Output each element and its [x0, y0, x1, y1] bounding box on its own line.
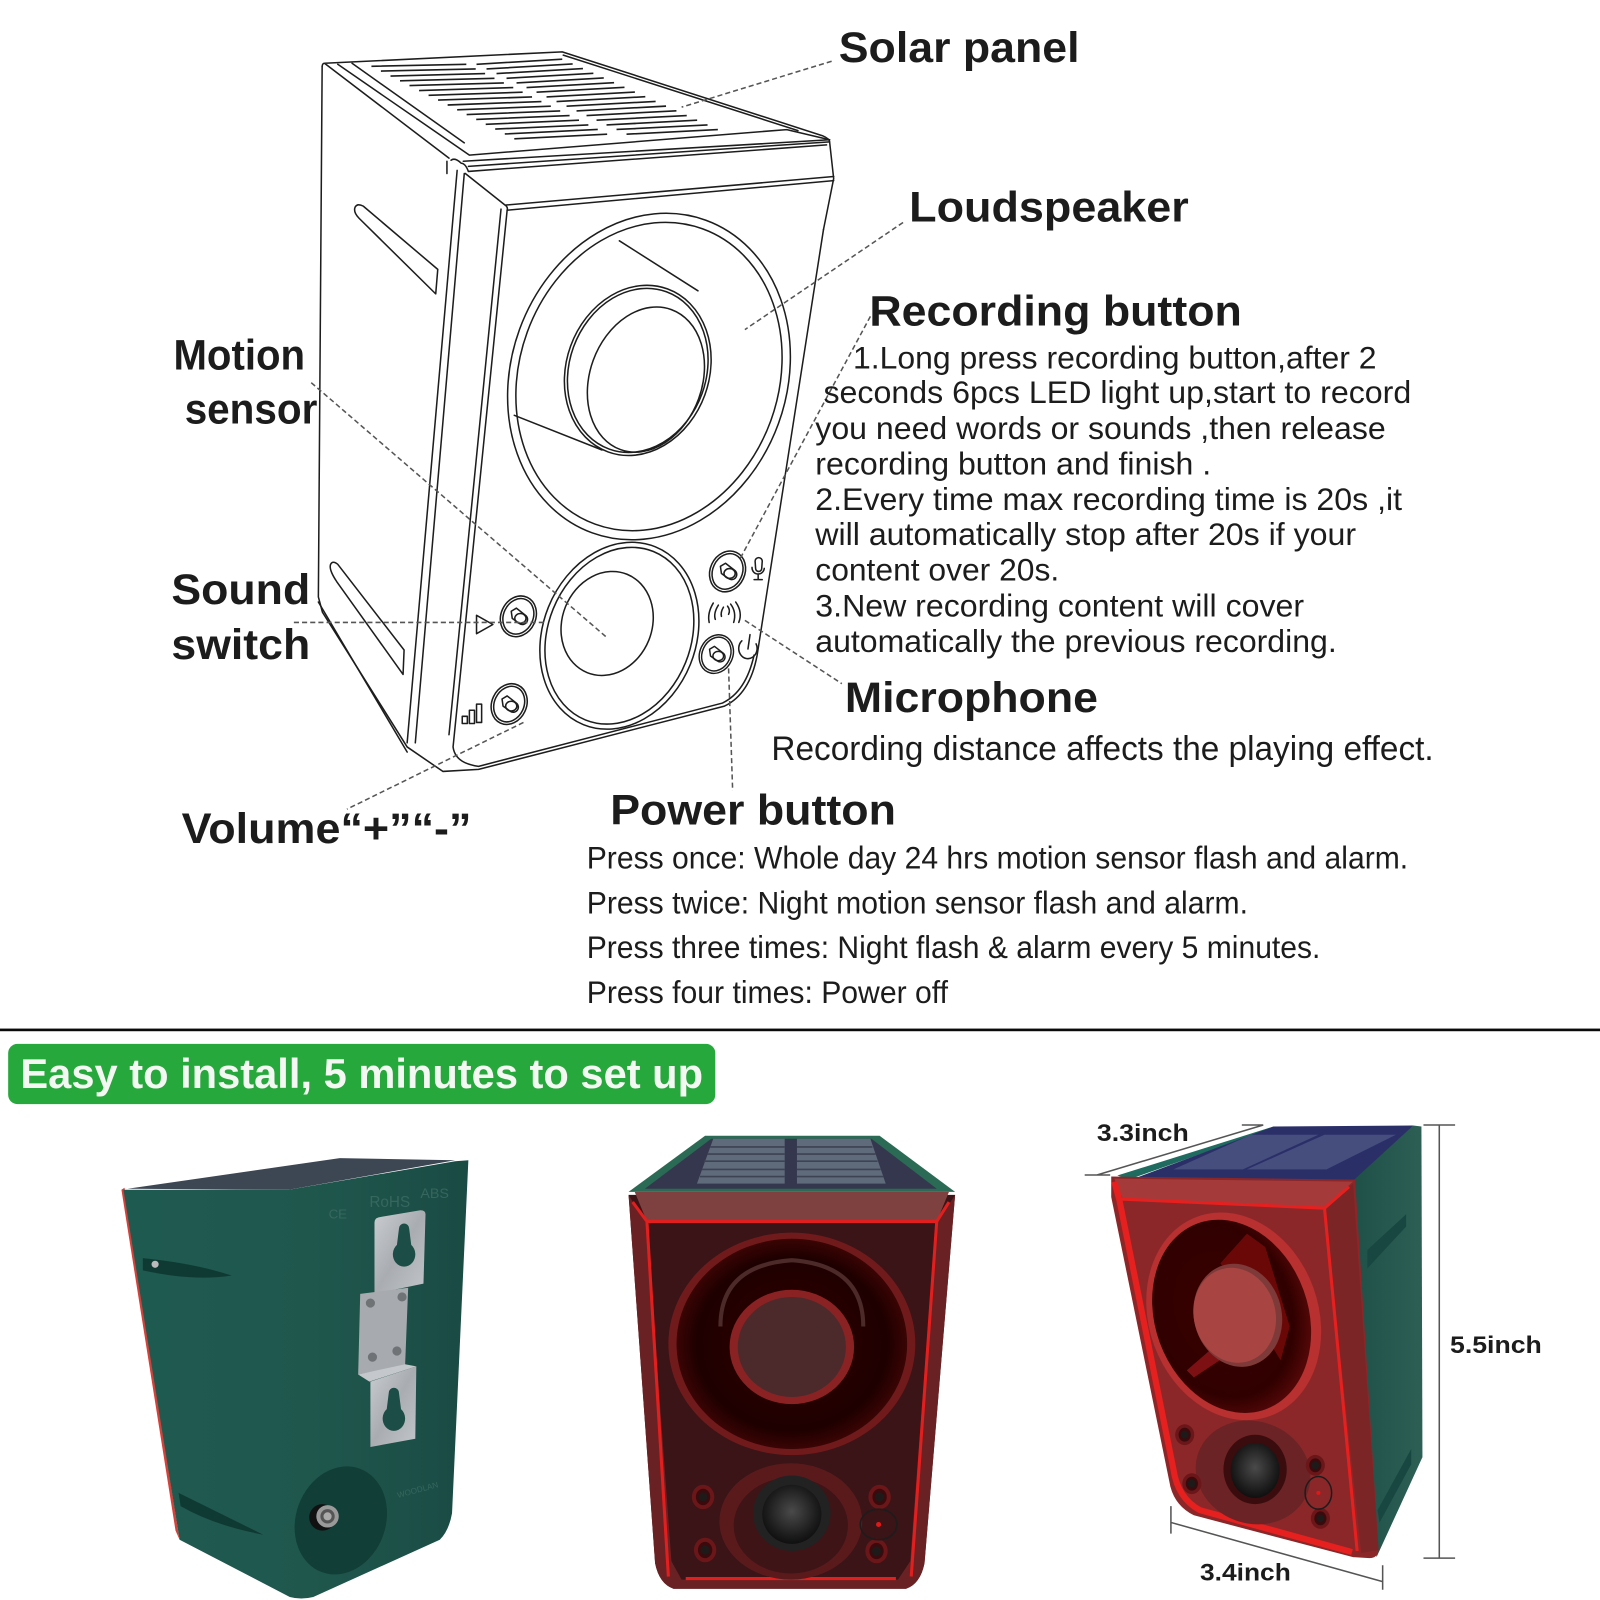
heading: motion sensor	[173, 331, 318, 433]
side slots	[1367, 1214, 1411, 1522]
side bezel	[1324, 1184, 1379, 1553]
heading: motion sensor: Motion	[173, 331, 305, 379]
solar top	[629, 1136, 955, 1192]
icon: sound waves	[709, 602, 740, 622]
solar top edge	[128, 1158, 455, 1190]
text: power button modes: Press three times: Night flash & alarm every 5 minutes.	[587, 929, 1320, 965]
heading: volume: Volume“+”“-”	[182, 805, 471, 853]
mount slots	[143, 1258, 263, 1535]
green housing	[123, 1160, 468, 1598]
text: power button modes	[587, 839, 1408, 1010]
heading: power button: Power button	[610, 786, 896, 834]
LEDs	[692, 1485, 714, 1509]
dimension lines	[1085, 1125, 1455, 1590]
LED	[868, 1485, 891, 1509]
LED	[694, 1538, 716, 1562]
red edges	[633, 1202, 949, 1579]
line drawing of the alarm unit	[318, 52, 835, 771]
horn	[668, 1233, 915, 1455]
volume button	[485, 678, 534, 730]
regulatory marks: WOODLAN	[396, 1480, 439, 1500]
top bezel	[1114, 1179, 1353, 1207]
red edges	[1118, 1187, 1357, 1551]
LEDs	[1175, 1424, 1194, 1445]
LED	[1182, 1473, 1201, 1494]
regulatory marks: CE	[329, 1206, 347, 1221]
PIR sensor	[719, 1463, 862, 1580]
heading: sound switch: switch	[171, 621, 310, 669]
red housing	[1111, 1177, 1379, 1558]
sensor cone	[280, 1453, 402, 1588]
text: recording instructions: you need words or sounds ,then release	[815, 411, 1386, 446]
top bezel	[635, 1192, 949, 1221]
text: microphone note: Recording distance affects the playing effect.	[771, 730, 1434, 768]
horn	[1118, 1188, 1350, 1445]
heading: motion sensor: sensor	[185, 385, 318, 433]
dashed leader lines	[294, 61, 903, 809]
light sensor	[860, 1509, 897, 1540]
text: recording instructions: content over 20s.	[815, 553, 1059, 588]
light sensor	[1305, 1477, 1332, 1509]
recording button	[703, 545, 752, 598]
green side	[1350, 1126, 1422, 1557]
product photo: angled view with dimensions	[1085, 1120, 1542, 1590]
heading: sound switch	[171, 566, 310, 669]
heading: recording button: Recording button	[869, 288, 1242, 336]
LED	[1306, 1455, 1325, 1476]
regulatory marks	[329, 1186, 449, 1500]
heading: microphone: Microphone	[845, 674, 1098, 722]
solar top	[1117, 1126, 1413, 1181]
motion sensor lens	[512, 518, 726, 753]
red housing	[629, 1195, 955, 1589]
text: recording instructions: 2.Every time max recording time is 20s ,it	[815, 482, 1402, 517]
side slots	[330, 205, 438, 674]
regulatory marks: ABS	[420, 1186, 449, 1202]
product photo: rear view	[121, 1158, 468, 1598]
text: recording instructions: 3.New recording content will cover	[815, 588, 1304, 623]
power button	[693, 629, 740, 679]
dimension label: 3.3inch: 3.3inch	[1097, 1120, 1189, 1147]
text: power button modes: Press twice: Night motion sensor flash and alarm.	[587, 884, 1248, 920]
metal bracket	[358, 1210, 426, 1447]
text: recording instructions: recording button and finish .	[815, 446, 1211, 481]
text: recording instructions: will automatically stop after 20s if your	[814, 517, 1356, 552]
solar panel top	[322, 52, 834, 230]
product photo: front view	[629, 1136, 955, 1589]
text: recording instructions: automatically the previous recording.	[815, 624, 1337, 659]
text: recording instructions: 1.Long press recording button,after 2	[853, 340, 1377, 375]
heading: loudspeaker: Loudspeaker	[909, 183, 1189, 231]
banner: easy to install: Easy to install, 5 minutes to set up	[20, 1050, 703, 1097]
loudspeaker horn	[463, 173, 835, 580]
text: recording instructions	[814, 340, 1411, 659]
LED	[865, 1539, 888, 1563]
heading: solar panel: Solar panel	[839, 24, 1080, 72]
icon: power symbol	[739, 635, 757, 659]
body outline	[318, 66, 823, 771]
dimension label: 5.5inch: 5.5inch	[1450, 1332, 1542, 1359]
text: power button modes: Press four times: Power off	[587, 974, 948, 1010]
dimension label: 3.4inch: 3.4inch	[1200, 1560, 1291, 1587]
PIR sensor	[1181, 1405, 1325, 1540]
regulatory marks: RoHS	[369, 1194, 410, 1211]
icon: play triangle	[477, 615, 493, 634]
heading: sound switch: Sound	[171, 566, 310, 614]
sound switch button	[494, 590, 543, 643]
icon: volume bars	[462, 704, 482, 723]
LED	[1311, 1508, 1330, 1529]
icon: microphone	[752, 558, 764, 580]
text: power button modes: Press once: Whole day 24 hrs motion sensor flash and alarm.	[587, 839, 1408, 875]
text: recording instructions: seconds 6pcs LED light up,start to record	[823, 375, 1411, 410]
